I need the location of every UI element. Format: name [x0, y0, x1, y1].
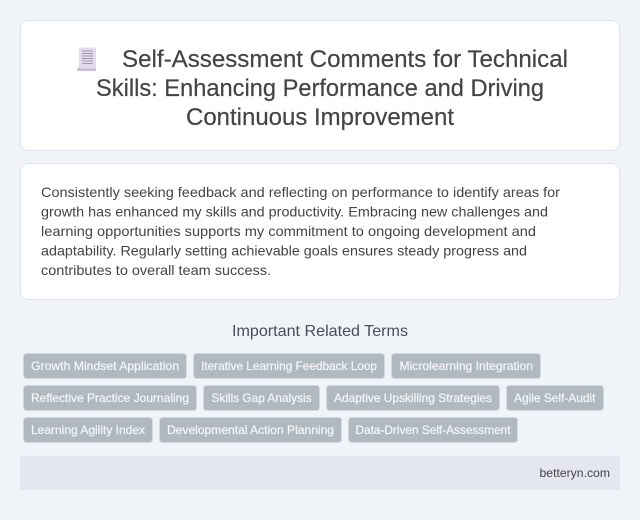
text block: description: contributes to overall team success.	[41, 262, 271, 278]
icon: scroll document	[77, 48, 96, 71]
tag	[348, 418, 518, 442]
footer bar	[20, 456, 620, 490]
panel: title card	[20, 20, 620, 150]
tag: Skills Gap Analysis	[212, 391, 312, 405]
tag	[326, 386, 500, 410]
panel: description card	[20, 164, 620, 300]
title: Continuous Improvement	[186, 104, 454, 131]
heading: important related terms: Important Related Terms	[232, 323, 408, 340]
tag	[392, 354, 540, 378]
tag: Data-Driven Self-Assessment	[356, 423, 511, 437]
title	[96, 46, 568, 131]
tag: Adaptive Upskilling Strategies	[334, 391, 492, 405]
tag	[194, 354, 384, 378]
text block: description: learning opportunities supports my commitment to ongoing development and	[41, 223, 536, 239]
text block: description: growth has enhanced my skills and productivity. Embracing new challenges and	[41, 204, 548, 220]
tag	[204, 386, 320, 410]
footer source text: betteryn.com	[540, 466, 610, 480]
tag: Reflective Practice Journaling	[31, 391, 189, 405]
title: Skills: Enhancing Performance and Driving	[96, 75, 544, 102]
tag: Growth Mindset Application	[31, 359, 179, 373]
tag: Learning Agility Index	[31, 423, 145, 437]
text block: description	[41, 184, 560, 278]
tag: Developmental Action Planning	[167, 423, 334, 437]
text block: description: Consistently seeking feedback and reflecting on performance to identify areas for	[41, 184, 560, 200]
tag: Microlearning Integration	[400, 359, 533, 373]
tag: Agile Self-Audit	[514, 391, 596, 405]
tag	[506, 386, 604, 410]
title: Self-Assessment Comments for Technical	[122, 46, 568, 73]
tag	[24, 386, 196, 410]
tag: Iterative Learning Feedback Loop	[201, 359, 377, 373]
tag	[160, 418, 342, 442]
tag	[24, 354, 186, 378]
panel: related term tags	[24, 354, 604, 442]
tag	[24, 418, 152, 442]
text block: description: adaptability. Regularly setting achievable goals ensures steady progress and	[41, 242, 527, 258]
